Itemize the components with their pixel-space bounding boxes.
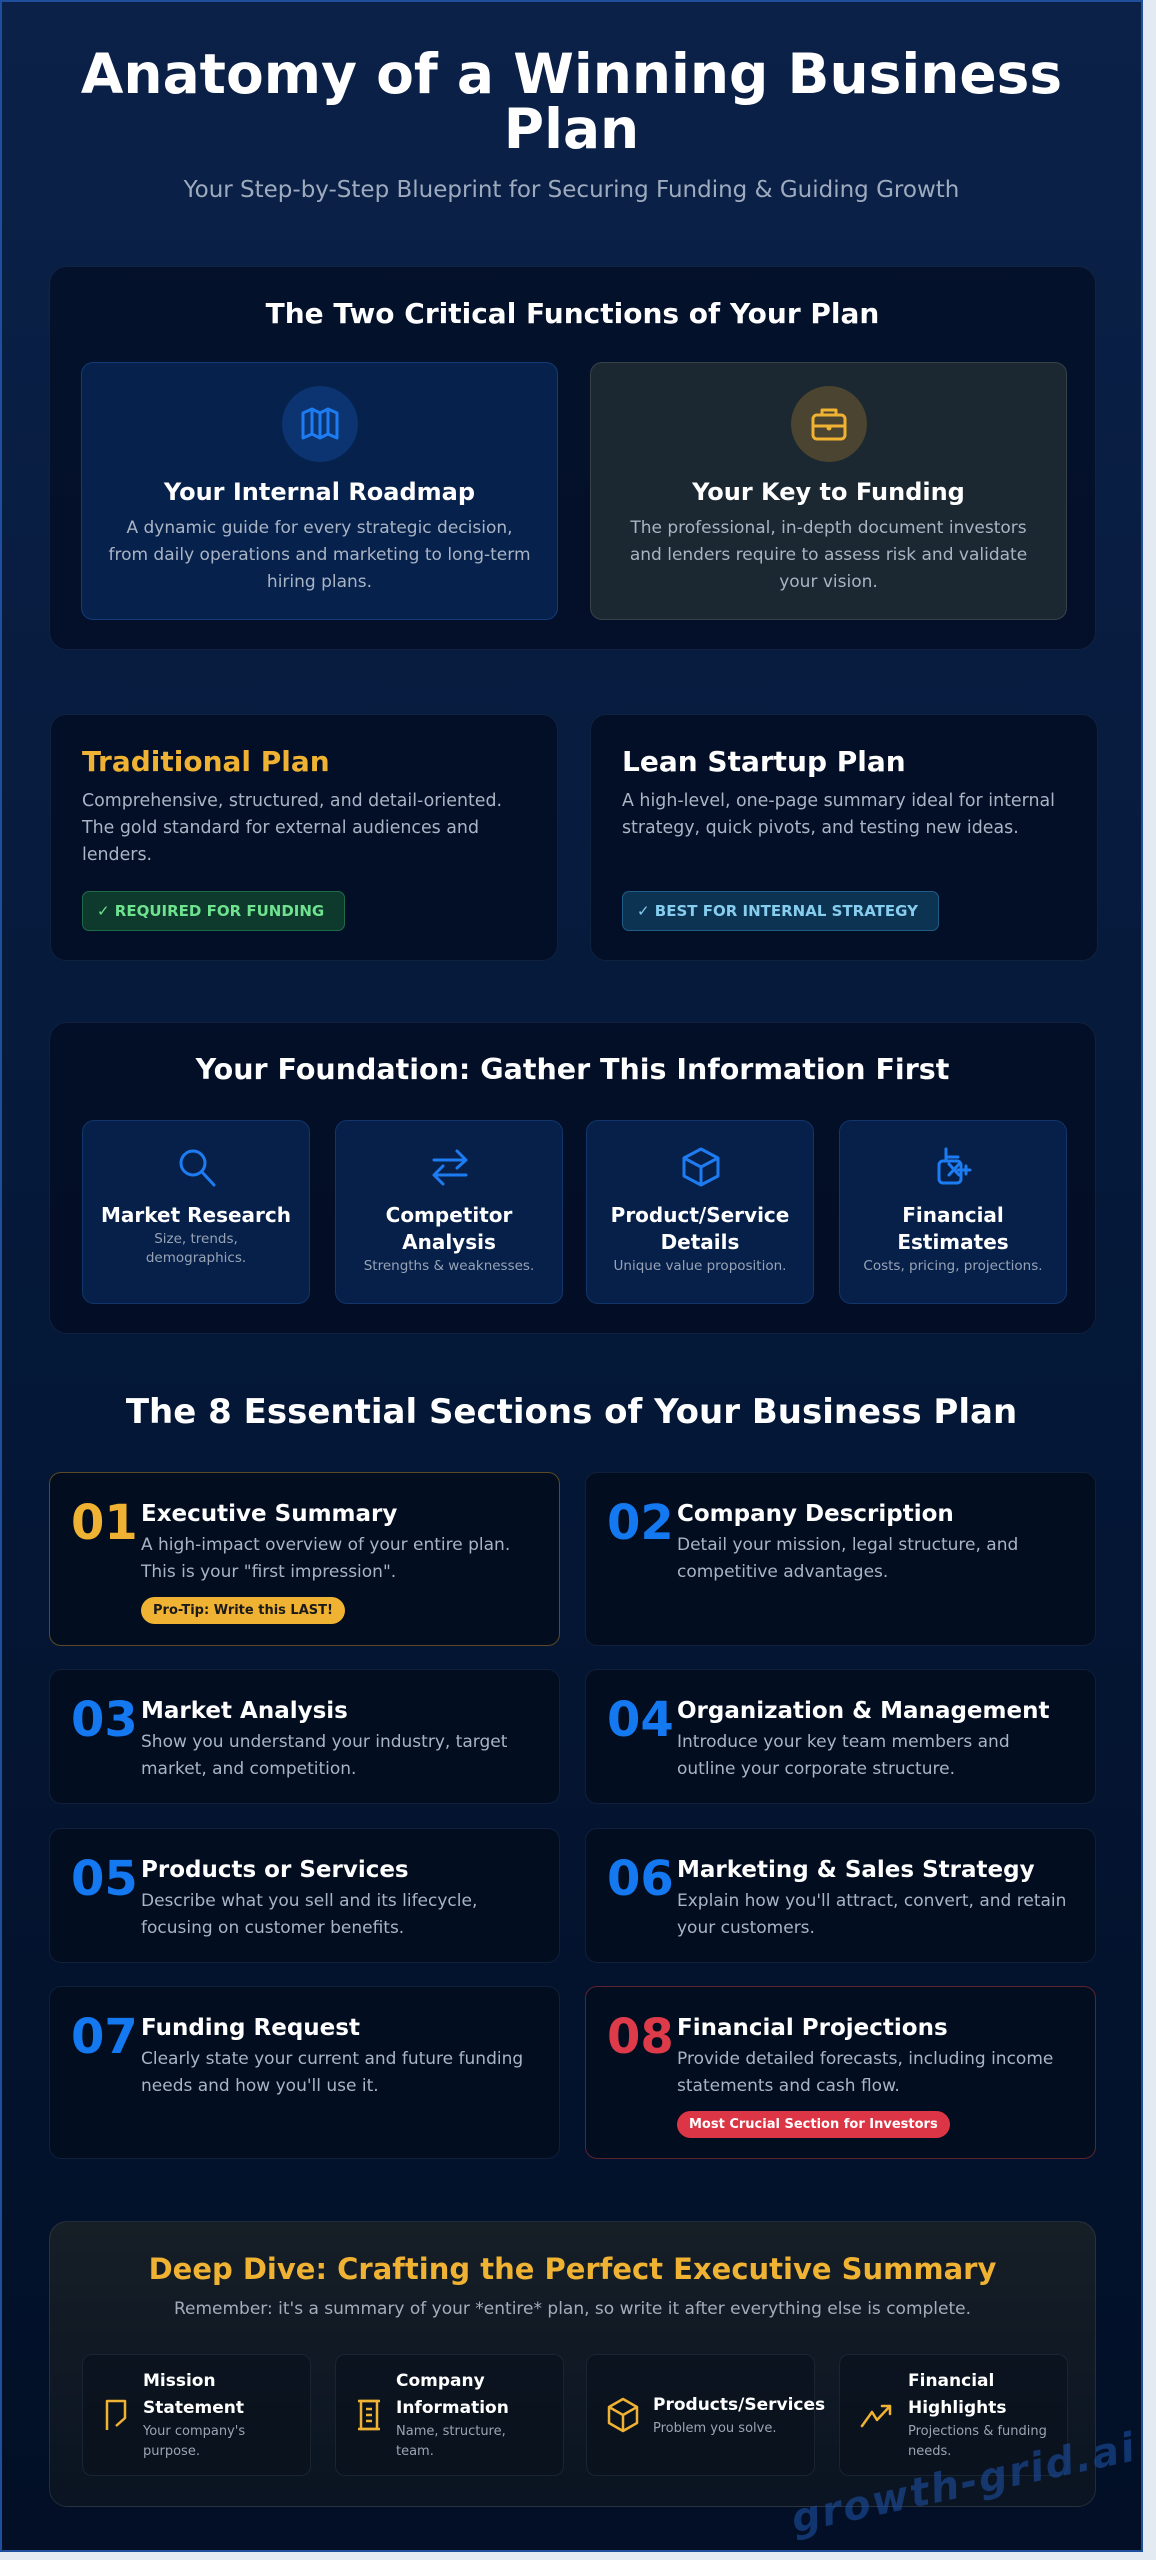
icon: arrows	[432, 1149, 468, 1186]
card: internal roadmap: hiring plans.	[267, 572, 372, 592]
panel: traditional plan	[50, 714, 558, 961]
card: market research: Market Research	[101, 1203, 291, 1227]
section 08: Financial Projections	[677, 2015, 948, 2041]
title: Plan	[504, 97, 639, 161]
panel: lean startup plan: A high-level, one-page summary ideal for internal	[622, 791, 1055, 811]
icon: document	[358, 2400, 380, 2430]
section 07	[49, 1986, 560, 2159]
card: market research	[82, 1120, 310, 1304]
section 07: Funding Request	[141, 2015, 360, 2041]
icon: briefcase	[791, 386, 867, 462]
card: competitor analysis: Analysis	[402, 1230, 496, 1254]
section 06: 06	[607, 1851, 674, 1907]
section 01: A high-impact overview of your entire plan.	[141, 1535, 510, 1555]
card: competitor analysis: Strengths & weaknesses.	[364, 1258, 534, 1274]
section 02: competitive advantages.	[677, 1562, 888, 1582]
card: internal roadmap: from daily operations and marketing to long-term	[108, 545, 531, 565]
card: product details	[586, 1120, 814, 1304]
section 01: Executive Summary	[141, 1501, 397, 1527]
section 05: Describe what you sell and its lifecycle,	[141, 1891, 477, 1911]
card: mission: Statement	[143, 2398, 244, 2418]
section 06: your customers.	[677, 1918, 815, 1938]
card: product details: Product/Service	[611, 1203, 789, 1227]
section 07: needs and how you'll use it.	[141, 2076, 379, 2096]
card: products	[586, 2354, 815, 2476]
card: company info	[335, 2354, 564, 2476]
icon: map	[282, 386, 358, 462]
pill: most crucial	[677, 2111, 950, 2138]
card: mission	[82, 2354, 311, 2476]
panel: traditional plan: Traditional Plan	[82, 745, 330, 778]
panel: two critical functions	[49, 266, 1096, 650]
badge: required for funding: ✓ REQUIRED FOR FUNDING	[97, 902, 324, 920]
watermark: growth-grid.ai	[787, 2424, 1141, 2542]
card: competitor analysis: Competitor	[386, 1203, 512, 1227]
icon: magnifier	[180, 1150, 216, 1187]
icon: flag	[106, 2400, 126, 2430]
card: key to funding: your vision.	[779, 572, 878, 592]
card: internal roadmap: A dynamic guide for every strategic decision,	[126, 518, 513, 538]
section 04: Organization & Management	[677, 1698, 1049, 1724]
section 01: This is your "first impression".	[141, 1562, 396, 1582]
card: products: Products/Services	[653, 2394, 825, 2414]
section 04	[585, 1669, 1096, 1804]
section 02	[585, 1472, 1096, 1646]
title	[81, 42, 1062, 161]
card: financial highlights: Financial	[908, 2371, 994, 2391]
section 02: 02	[607, 1495, 674, 1551]
section 05: Products or Services	[141, 1857, 409, 1883]
section 08	[585, 1986, 1096, 2159]
subtitle: Your Step-by-Step Blueprint for Securing Funding & Guiding Growth	[184, 177, 959, 203]
section 02: Company Description	[677, 1501, 954, 1527]
card: key to funding	[590, 362, 1067, 620]
card: financial estimates	[839, 1120, 1067, 1304]
card: financial estimates: Financial	[902, 1203, 1004, 1227]
card: product details: Unique value proposition.	[614, 1258, 786, 1274]
card: competitor analysis	[335, 1120, 563, 1304]
panel: traditional plan: The gold standard for external audiences and	[82, 818, 479, 838]
section 03: Market Analysis	[141, 1698, 348, 1724]
pill: pro tip	[141, 1597, 345, 1624]
section 03: 03	[71, 1692, 138, 1748]
panel heading: The Two Critical Functions of Your Plan	[266, 297, 879, 330]
card: mission: Mission	[143, 2371, 216, 2391]
panel: lean startup plan: Lean Startup Plan	[622, 745, 906, 778]
badge: internal strategy: ✓ BEST FOR INTERNAL STRATEGY	[637, 902, 918, 920]
icon: trend arrow	[860, 2404, 892, 2428]
card: mission: Your company's	[143, 2424, 245, 2439]
section 08: statements and cash flow.	[677, 2076, 900, 2096]
card: internal roadmap: Your Internal Roadmap	[164, 478, 475, 506]
badge: internal strategy	[622, 891, 939, 931]
section 05: 05	[71, 1851, 138, 1907]
icon: cube	[608, 2398, 638, 2432]
panel: traditional plan: Comprehensive, structured, and detail-oriented.	[82, 791, 502, 811]
section 08: 08	[607, 2009, 674, 2065]
pill: pro tip: Pro-Tip: Write this LAST!	[153, 1603, 333, 1618]
card: company info: team.	[396, 2444, 434, 2459]
panel: lean startup plan	[590, 714, 1098, 961]
panel: traditional plan: lenders.	[82, 845, 152, 865]
section 06	[585, 1828, 1096, 1963]
card: financial highlights: needs.	[908, 2444, 951, 2459]
card: financial estimates: Estimates	[897, 1230, 1009, 1254]
card: key to funding: Your Key to Funding	[692, 478, 965, 506]
card: financial highlights	[839, 2354, 1068, 2476]
section 05	[49, 1828, 560, 1963]
section 03: market, and competition.	[141, 1759, 356, 1779]
section 06: Explain how you'll attract, convert, and retain	[677, 1891, 1066, 1911]
section 07: 07	[71, 2009, 138, 2065]
panel heading: Your Foundation: Gather This Information First	[196, 1053, 949, 1086]
section 03	[49, 1669, 560, 1804]
section 03: Show you understand your industry, target	[141, 1732, 507, 1752]
section 06: Marketing & Sales Strategy	[677, 1857, 1035, 1883]
pill: most crucial: Most Crucial Section for Investors	[689, 2117, 938, 2132]
card: company info: Company	[396, 2371, 485, 2391]
icon: cube	[682, 1148, 720, 1186]
card: product details: Details	[661, 1230, 739, 1254]
card: mission: purpose.	[143, 2444, 200, 2459]
section 08: Provide detailed forecasts, including income	[677, 2049, 1053, 2069]
card: internal roadmap	[81, 362, 558, 620]
heading: 8 sections: The 8 Essential Sections of Your Business Plan	[126, 1392, 1017, 1432]
section 04: 04	[607, 1692, 674, 1748]
card: market research: demographics.	[146, 1250, 246, 1266]
section 01	[49, 1472, 560, 1646]
section 07: Clearly state your current and future funding	[141, 2049, 523, 2069]
section 05: focusing on customer benefits.	[141, 1918, 404, 1938]
panel heading: Deep Dive: Crafting the Perfect Executive Summary	[149, 2252, 996, 2286]
section 04: outline your corporate structure.	[677, 1759, 955, 1779]
section 01: 01	[71, 1495, 138, 1551]
card: company info: Information	[396, 2398, 509, 2418]
badge: required for funding	[82, 891, 345, 931]
card: products: Problem you solve.	[653, 2420, 776, 2436]
card: financial highlights: Projections & funding	[908, 2424, 1047, 2439]
card: market research: Size, trends,	[154, 1231, 238, 1247]
section 02: Detail your mission, legal structure, and	[677, 1535, 1018, 1555]
card: company info: Name, structure,	[396, 2424, 506, 2439]
card: key to funding: The professional, in-depth document investors	[630, 518, 1027, 538]
section 04: Introduce your key team members and	[677, 1732, 1010, 1752]
panel: lean startup plan: strategy, quick pivots, and testing new ideas.	[622, 818, 1019, 838]
card: financial estimates: Costs, pricing, projections.	[863, 1258, 1043, 1274]
panel: foundation	[49, 1022, 1096, 1334]
subtitle: Remember: it's a summary of your *entire* plan, so write it after everything else is complete.	[174, 2299, 971, 2319]
icon: calculator	[938, 1148, 972, 1184]
card: financial highlights: Highlights	[908, 2398, 1006, 2418]
title: Anatomy of a Winning Business	[81, 42, 1062, 106]
card: key to funding: and lenders require to assess risk and validate	[630, 545, 1027, 565]
panel: deep dive	[49, 2221, 1096, 2507]
